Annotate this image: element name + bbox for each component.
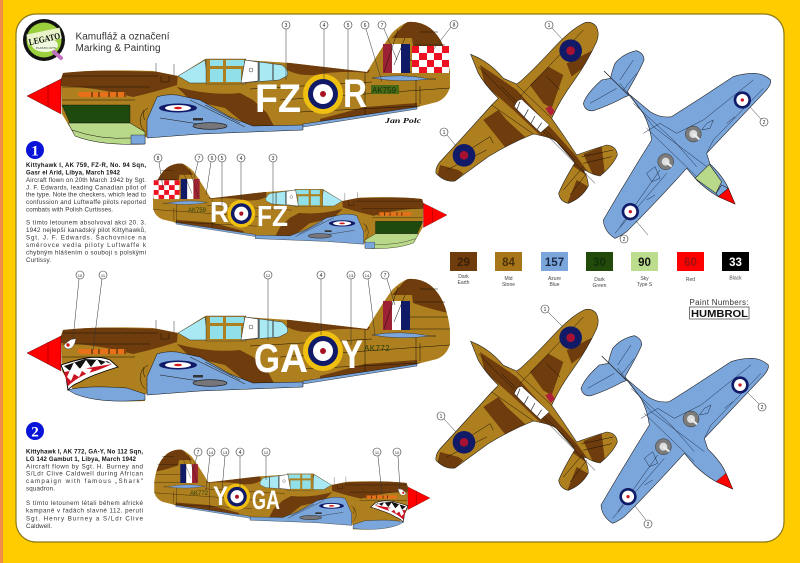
aircraft 1 side view FZ-R (27, 18, 450, 144)
aircraft 2 upper surface view (436, 309, 617, 492)
callouts aircraft 1 side: 3 (285, 23, 288, 29)
callouts aircraft 2 side: 10 (78, 273, 83, 278)
text block aircraft 1: the type. Note the checkers, which lead to (26, 192, 147, 199)
callouts plan views: 2 (623, 237, 626, 243)
swatch 157: 157 (545, 257, 564, 269)
callouts aircraft 2 side: 11 (101, 273, 106, 278)
code letters: Z (278, 77, 301, 121)
callouts aircraft 1 opposite side: 5 (221, 156, 224, 162)
code letters: Z (272, 201, 288, 233)
text block aircraft 2: Sgt. Henry Burney a S/Ldr Clive (26, 515, 144, 522)
callouts aircraft 1 opposite side: 7 (198, 156, 201, 162)
code letters: R (210, 197, 229, 229)
swatch 84: Stone (502, 282, 515, 288)
text block aircraft 2: Caldwell. (26, 523, 52, 530)
swatch 30 (586, 252, 613, 289)
swatch 90: Sky (640, 276, 649, 282)
swatch 33 (722, 252, 749, 282)
code letters: A (280, 337, 308, 381)
callouts plan views: 2 (761, 405, 764, 411)
callouts aircraft 1 side (282, 20, 458, 82)
code letters: A (266, 485, 280, 515)
code letters: G (254, 337, 280, 381)
code letters: F (257, 201, 272, 233)
callouts aircraft 1 opposite side: 4 (240, 156, 243, 162)
callouts aircraft 2 side: 14 (365, 273, 370, 278)
callouts aircraft 2 opposite side: 4 (239, 450, 242, 456)
paint swatches (450, 252, 749, 289)
code letters: R (343, 72, 367, 116)
text block aircraft 2: squadron. (26, 486, 55, 492)
callouts plan views: 1 (548, 23, 551, 29)
swatch 33: Black (729, 276, 742, 282)
badge 2 (26, 422, 44, 440)
text block aircraft 1: 1942 nejlepší kanadský pilot Kittyhawků, (26, 227, 146, 234)
callouts aircraft 2 side (73, 271, 395, 350)
swatch 90: 90 (638, 257, 651, 269)
text block aircraft 1: směrovce vedla piloty Luftwaffe k (26, 242, 147, 249)
callouts aircraft 2 opposite side (193, 448, 401, 495)
code letters (213, 481, 280, 515)
callouts aircraft 2 side: 12 (266, 273, 271, 278)
callouts aircraft 1 side: 6 (364, 23, 367, 29)
callouts aircraft 2 opposite side: 13 (223, 450, 228, 455)
swatch 157: Blue (549, 282, 560, 288)
paint numbers legend (690, 298, 749, 320)
swatch 29 (450, 252, 477, 286)
badge 1 (26, 141, 44, 160)
aircraft 2 opposite side view: AK772 (190, 491, 209, 497)
text block aircraft 1: confussion and Luftwaffe pilots reported (26, 199, 147, 206)
swatch 30: Dark (594, 277, 605, 283)
callouts aircraft 2 side: 4 (320, 273, 323, 279)
text block aircraft 1: chybným hlášením o souboji s polskými (26, 250, 146, 256)
text block aircraft 1: Curtissy. (26, 257, 51, 264)
swatch 157 (541, 252, 568, 288)
callouts aircraft 1 side: 4 (323, 23, 326, 29)
callouts aircraft 1 opposite side: 6 (211, 156, 214, 162)
icon: Legato logo: LEGATO (28, 31, 61, 47)
callouts plan views: 2 (647, 522, 650, 528)
text block aircraft 2: S/Ldr Clive Caldwell during African (26, 471, 144, 478)
text block aircraft 2: LG 142 Gambut 1, Libya, March 1942 (26, 457, 137, 463)
text block aircraft 2: Aircraft flown by Sgt. H. Burney and (26, 463, 144, 470)
aircraft 1 opposite side view (153, 161, 447, 249)
text block aircraft 2: kampaně v řadách slavné 112. peruti (26, 508, 143, 515)
code letters (254, 333, 363, 381)
title: Marking & Painting (76, 43, 160, 54)
code letters: G (252, 485, 266, 515)
title: Kamufláž a označení (76, 32, 170, 42)
callouts aircraft 1 opposite side: 8 (157, 156, 160, 162)
text block aircraft 1: combats with Polish Curtisses. (26, 206, 113, 214)
callouts aircraft 2 opposite side: 11 (375, 450, 380, 455)
badge 1: 1 (31, 144, 39, 160)
aircraft 2 opposite side view (154, 447, 430, 530)
callouts plan views: 1 (440, 414, 443, 420)
callouts aircraft 2 side: 7 (384, 273, 387, 279)
swatch 60 (677, 252, 704, 283)
swatch 30: Green (593, 283, 607, 289)
text block aircraft 2 (26, 450, 144, 530)
swatch 90 (631, 252, 658, 288)
callouts plan views: 1 (544, 307, 547, 313)
code letters (255, 72, 367, 121)
text block aircraft 1: J. F. Edwards, leading Canadian pilot of (26, 184, 146, 191)
aircraft 2 side view GA-Y (27, 275, 450, 401)
callouts aircraft 1 side: 7 (381, 23, 384, 29)
title (76, 32, 170, 54)
text block aircraft 2: Kittyhawk I, AK 772, GA-Y, No 112 Sqn, (26, 450, 143, 456)
code letters: Y (213, 481, 228, 511)
callouts aircraft 1 side: 8 (453, 22, 456, 28)
paint numbers legend: HUMBROL (691, 309, 748, 320)
swatch 60: 60 (684, 257, 697, 269)
callouts aircraft 2 opposite side: 10 (395, 450, 400, 455)
icon: Legato logo (23, 19, 65, 61)
swatch 84 (495, 252, 522, 288)
callouts plan views (437, 21, 768, 528)
icon: Legato logo: PLASTIC KITS (36, 46, 56, 50)
signature: Jan Polc (384, 116, 422, 125)
code letters: Y (341, 333, 363, 377)
callouts aircraft 2 opposite side: 14 (209, 450, 214, 455)
aircraft 2 lower surface view (581, 336, 768, 523)
swatch 30: 30 (593, 257, 606, 269)
callouts plan views: 1 (443, 130, 446, 136)
text block aircraft 1 (26, 163, 147, 264)
text block aircraft 1: Sgt. J. F. Edwards. Šachovnice na (26, 234, 147, 242)
swatch 157: Azure (548, 276, 561, 282)
serial: AK759 (372, 86, 397, 95)
aircraft 1 opposite side view: AK759 (188, 208, 207, 214)
callouts plan views: 2 (763, 120, 766, 126)
aircraft 1 upper surface view (436, 22, 617, 205)
text block aircraft 1: S tímto letounem absolvoval akci 20. 3. (26, 220, 146, 227)
swatch 29: Earth (458, 280, 470, 286)
swatch 33: 33 (729, 257, 742, 269)
callouts aircraft 2 side: 13 (349, 273, 354, 278)
text block aircraft 2: S tímto letounem létali během africké (26, 500, 144, 507)
text block aircraft 2: campaign with famous „Shark" (26, 478, 143, 485)
callouts aircraft 1 side: 5 (347, 23, 350, 29)
code letters: F (255, 77, 278, 121)
code letters (210, 197, 288, 233)
swatch 84: Mid (504, 276, 513, 282)
text block aircraft 1: Aircraft flown on 20th March 1942 by Sgt. (26, 177, 146, 184)
aircraft 1 lower surface view (583, 51, 771, 238)
paint numbers legend: Paint Numbers: (690, 298, 748, 307)
swatch 29: 29 (457, 257, 470, 269)
callouts aircraft 2 opposite side: 7 (197, 450, 200, 456)
text block aircraft 1: Gasr el Arid, Libya, March 1942 (26, 170, 121, 176)
swatch 60: Red (686, 277, 695, 283)
swatch 29: Dark (458, 274, 469, 280)
swatch 90: Type S (637, 282, 653, 288)
swatch 84: 84 (502, 257, 515, 269)
aircraft 2 side view GA-Y: AK772 (364, 344, 390, 353)
callouts aircraft 2 opposite side: 12 (264, 450, 269, 455)
badge 2: 2 (31, 424, 39, 440)
callouts aircraft 1 opposite side (154, 154, 277, 205)
text block aircraft 1: Kittyhawk I, AK 759, FZ-R, No. 94 Sqn, (26, 163, 146, 169)
callouts aircraft 1 opposite side: 3 (272, 156, 275, 162)
left stripe (0, 0, 3, 563)
